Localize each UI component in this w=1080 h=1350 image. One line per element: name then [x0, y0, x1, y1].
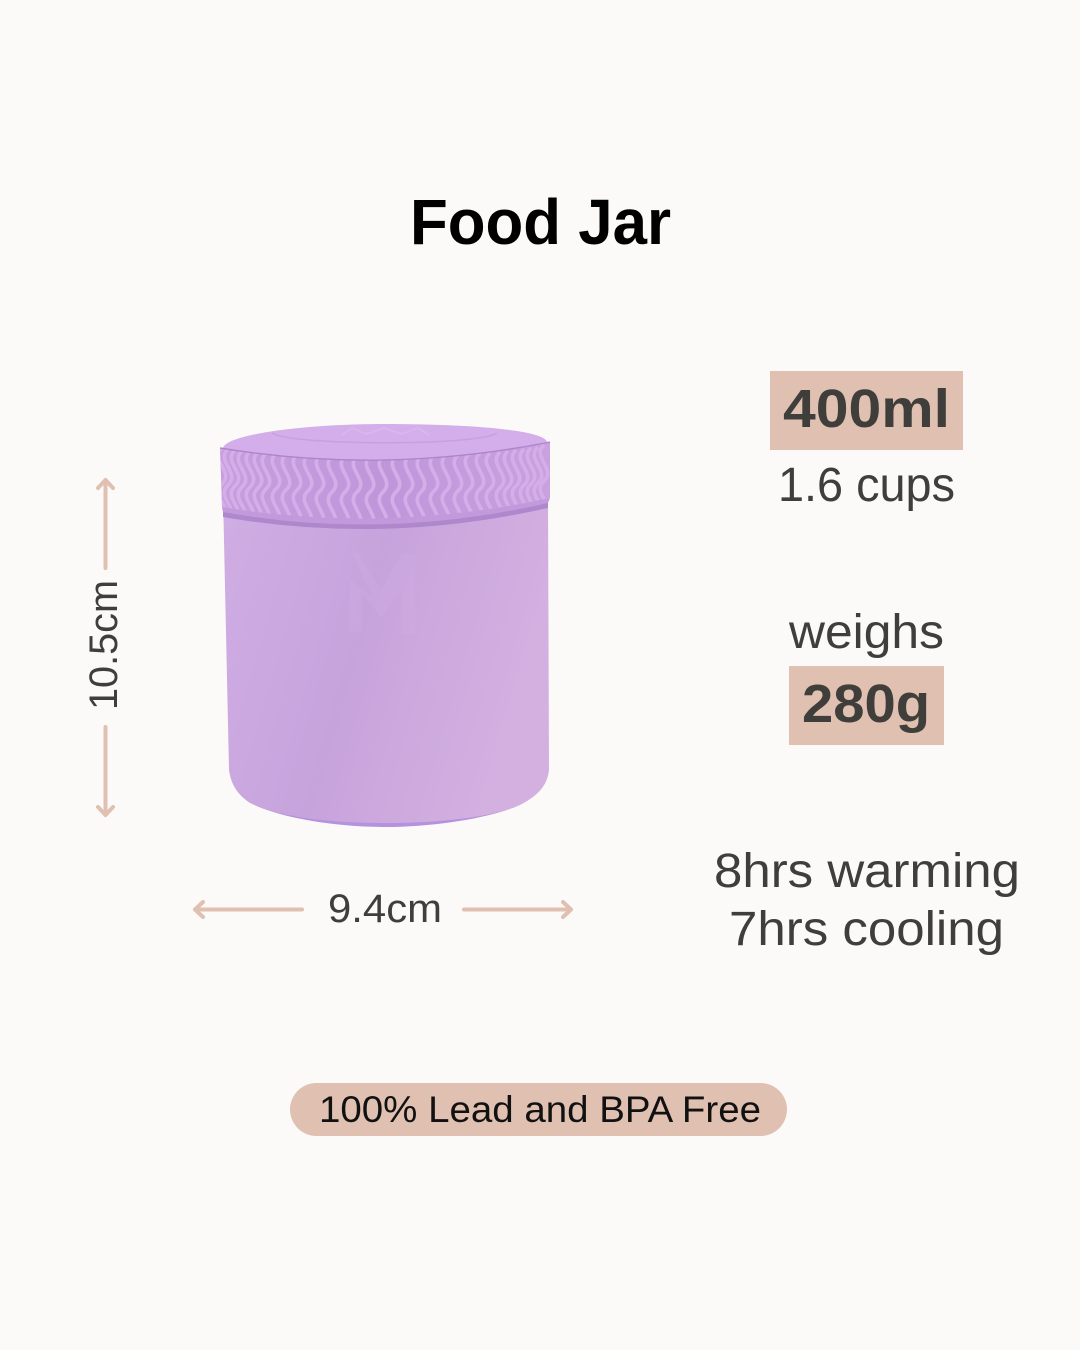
jar base shadow: [250, 803, 520, 827]
capacity highlight: 400ml: [783, 379, 950, 439]
arrow: width right: [464, 902, 571, 917]
capacity highlight: [770, 371, 963, 450]
weight label: weighs: [788, 606, 944, 659]
lid top: [223, 424, 547, 460]
icon: food jar product: [218, 424, 550, 827]
insulation text: 7hrs cooling: [729, 903, 1004, 956]
arrow: width left: [195, 902, 302, 917]
lid rim shadow: [220, 442, 550, 460]
lid embossed logo: [342, 428, 429, 435]
embossed M logo: [350, 553, 415, 634]
badge: lead and BPA free: [290, 1083, 787, 1136]
insulation text: [714, 845, 1020, 956]
badge: lead and BPA free: 100% Lead and BPA Free: [319, 1089, 761, 1130]
arrow: height down: [98, 727, 113, 815]
insulation text: 8hrs warming: [714, 845, 1020, 898]
title: Food Jar: [410, 186, 671, 258]
band lower rim: [222, 498, 550, 525]
weight highlight: 280g: [802, 674, 930, 734]
arrow: height up: [98, 480, 113, 568]
capacity in cups: 1.6 cups: [778, 459, 955, 512]
lid recessed circle: [272, 433, 497, 443]
lid band with wave ridges: [218, 442, 550, 528]
height label: 10.5cm: [82, 580, 126, 710]
jar body: [223, 495, 549, 826]
body shadow under lid: [223, 502, 548, 529]
width label: 9.4cm: [328, 887, 442, 931]
weight highlight: [789, 666, 944, 745]
